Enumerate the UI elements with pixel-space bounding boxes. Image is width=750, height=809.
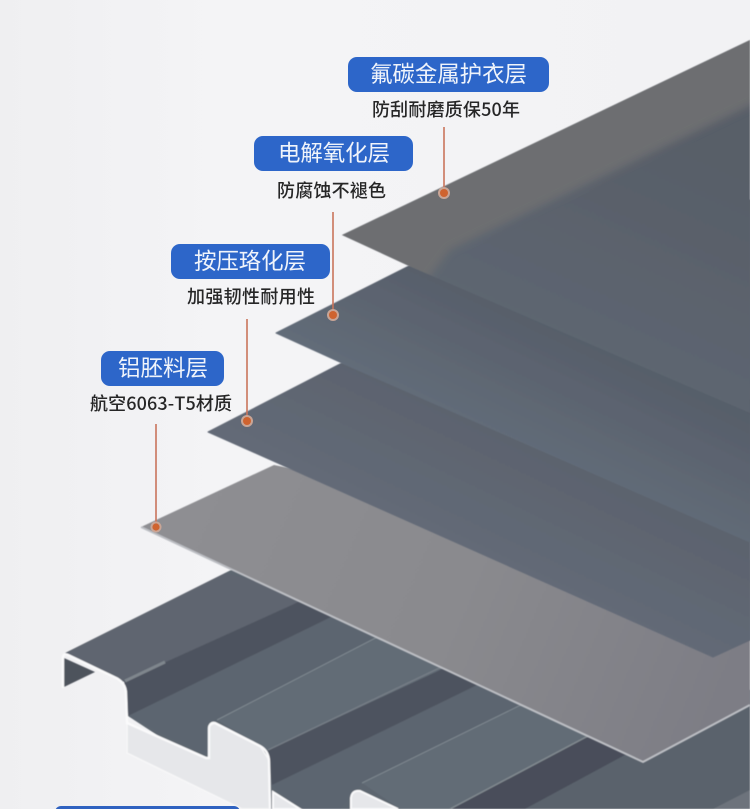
raised surface two xyxy=(217,632,456,750)
callout: fluorocarbon coating layer xyxy=(348,57,549,199)
label description: 航空6063-T5材质 xyxy=(90,390,232,416)
marker dot xyxy=(150,522,162,532)
label description: 防刮耐磨质保50年 xyxy=(372,96,520,122)
label title: 铝胚料层 xyxy=(118,351,208,383)
sheet edge highlight xyxy=(141,527,750,762)
sheet upper gray band xyxy=(342,41,750,274)
label title: 氟碳金属护衣层 xyxy=(370,57,527,89)
sheet: aluminium base layer xyxy=(141,465,750,762)
sheet: pressed chrome layer xyxy=(208,363,750,657)
raised surface three xyxy=(362,698,603,809)
third white profile section xyxy=(351,791,398,809)
highlight on wall two edge xyxy=(268,660,456,750)
sheet: electrolytic oxide layer xyxy=(276,200,750,542)
blue bar cut off at bottom xyxy=(55,806,240,809)
marker dot xyxy=(241,415,253,427)
seam line three xyxy=(362,698,535,783)
callout: pressed chrome layer xyxy=(171,244,330,427)
leader line xyxy=(246,319,248,420)
label title: 按压珞化层 xyxy=(194,244,306,276)
lower channel surface xyxy=(128,610,387,755)
right corner lighter surface xyxy=(713,790,750,809)
marker dot xyxy=(438,187,450,199)
leader line xyxy=(443,127,445,192)
top flange surface xyxy=(65,573,312,682)
hook end of flange xyxy=(64,658,95,687)
label description: 防腐蚀不褪色 xyxy=(277,177,386,203)
lower channel surface two xyxy=(272,677,535,809)
sheet: fluorocarbon coating layer xyxy=(342,40,750,412)
seam line two xyxy=(217,632,387,720)
highlight on wall one edge xyxy=(125,662,165,681)
label pill xyxy=(101,351,224,386)
second white profile section xyxy=(273,792,300,809)
right lower surface xyxy=(525,690,750,809)
white profile outline xyxy=(63,654,270,809)
label description: 加强韧性耐用性 xyxy=(187,283,315,309)
dark wall one xyxy=(124,595,345,716)
marker dot xyxy=(327,309,339,321)
front face of profile xyxy=(127,723,270,809)
leader line xyxy=(332,212,334,314)
label pill xyxy=(348,57,549,92)
label pill xyxy=(171,244,330,279)
extruded aluminium profile xyxy=(63,563,750,809)
profile base surface xyxy=(127,563,750,809)
label pill xyxy=(254,136,413,171)
dark wall two xyxy=(268,662,493,785)
dark wall three xyxy=(450,728,645,809)
label title: 电解氧化层 xyxy=(278,136,390,168)
highlight on wall three edge xyxy=(450,728,603,809)
callout: aluminium base layer xyxy=(90,351,232,532)
callout: electrolytic oxide layer xyxy=(254,136,413,321)
leader line xyxy=(155,424,157,526)
